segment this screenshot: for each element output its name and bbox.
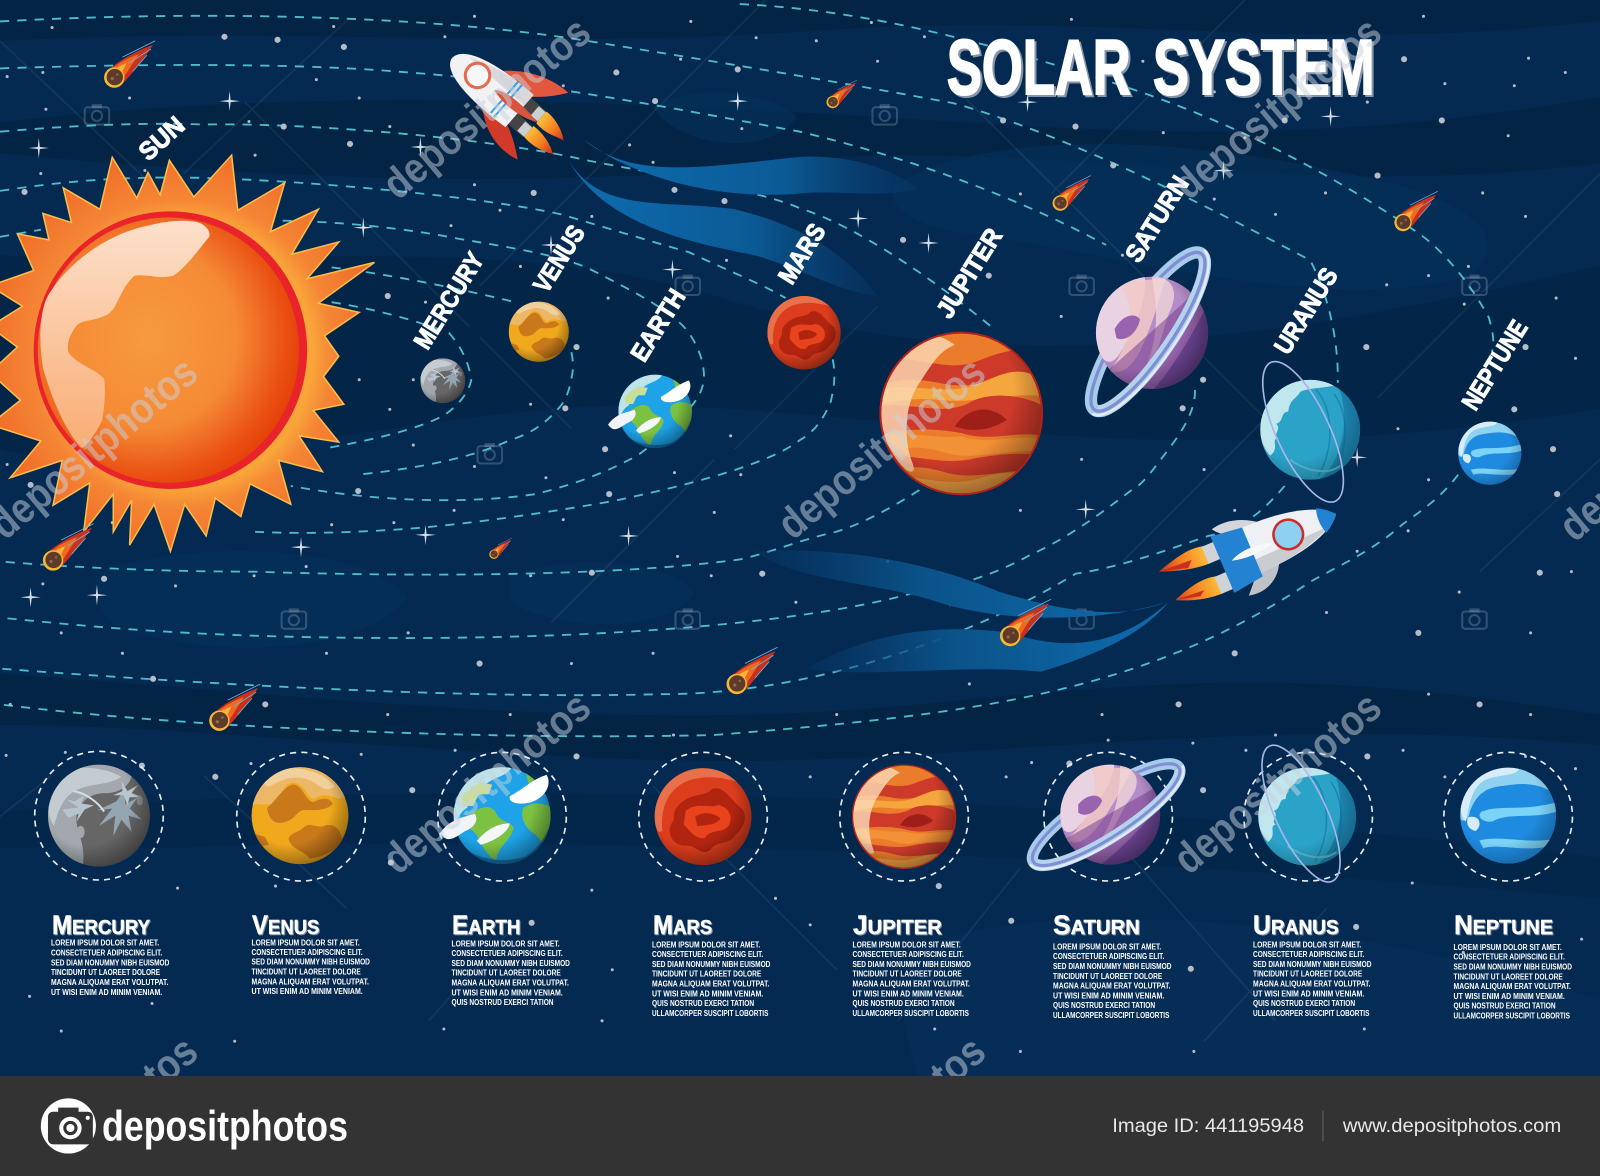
comets bbox=[43, 41, 1438, 731]
sun rays bbox=[0, 155, 374, 551]
Uranus thin ring bbox=[1247, 351, 1359, 512]
info: Mercury: UT WISI ENIM AD MINIM VENIAM. bbox=[51, 988, 162, 997]
watermarks: depositphotos bbox=[1164, 683, 1391, 884]
planet: Uranus orbit bbox=[1260, 380, 1360, 480]
title: SYSTEM bbox=[1153, 25, 1374, 111]
planet: Mercury orbit bbox=[420, 358, 465, 403]
info: Uranus: UT WISI ENIM AD MINIM VENIAM. bbox=[1253, 989, 1364, 998]
watermarks: depositphotos bbox=[374, 683, 600, 884]
blue rocket trail bottom bbox=[755, 550, 1168, 672]
label: Neptune: NEPTUNE bbox=[1457, 315, 1534, 415]
planet: Uranus row bbox=[1258, 768, 1356, 866]
info: Earth: SED DIAM NONUMMY NIBH EUISMOD bbox=[452, 959, 570, 968]
info: Venus: CONSECTETUER ADIPISCING ELIT. bbox=[252, 948, 363, 957]
info: Uranus: URANUS bbox=[1253, 910, 1339, 940]
sun bbox=[0, 155, 374, 551]
info: Mercury: SED DIAM NONUMMY NIBH EUISMOD bbox=[51, 958, 169, 967]
info: Venus: TINCIDUNT UT LAOREET DOLORE bbox=[252, 967, 361, 976]
planet: Earth orbit bbox=[608, 375, 693, 448]
planet: Venus orbit bbox=[509, 302, 569, 362]
info: Mercury bbox=[51, 910, 169, 997]
planet: Mars row bbox=[655, 768, 752, 865]
info: Neptune: QUIS NOSTRUD EXERCI TATION bbox=[1454, 1002, 1556, 1011]
info: Saturn: TINCIDUNT UT LAOREET DOLORE bbox=[1053, 972, 1163, 981]
label: Sun: SUN bbox=[134, 112, 190, 166]
info: Neptune: LOREM IPSUM DOLOR SIT AMET. bbox=[1454, 943, 1562, 952]
title: SOLAR bbox=[947, 25, 1131, 111]
info: Uranus: ULLAMCORPER SUSCIPIT LOBORTIS bbox=[1253, 1009, 1370, 1018]
footer url: www.depositphotos.com bbox=[1342, 1115, 1561, 1137]
footer logo icon bbox=[41, 1098, 96, 1154]
info: Saturn: ULLAMCORPER SUSCIPIT LOBORTIS bbox=[1053, 1011, 1170, 1020]
info: Uranus: TINCIDUNT UT LAOREET DOLORE bbox=[1253, 970, 1363, 979]
info: Earth: LOREM IPSUM DOLOR SIT AMET. bbox=[452, 939, 560, 948]
info: Uranus: MAGNA ALIQUAM ERAT VOLUTPAT. bbox=[1253, 980, 1370, 989]
sun highlight bbox=[40, 221, 210, 448]
planet: Jupiter row bbox=[847, 765, 961, 874]
planet: Saturn row bbox=[1021, 749, 1197, 886]
label: Jupiter: JUPITER bbox=[931, 224, 1008, 323]
label: Venus: VENUS bbox=[528, 221, 591, 298]
info: Mars: MARS bbox=[653, 910, 712, 940]
info: Mars: CONSECTETUER ADIPISCING ELIT. bbox=[652, 950, 763, 959]
info: Mars: UT WISI ENIM AD MINIM VENIAM. bbox=[652, 989, 763, 998]
info: Mercury: TINCIDUNT UT LAOREET DOLORE bbox=[51, 968, 161, 977]
info: Neptune: ULLAMCORPER SUSCIPIT LOBORTIS bbox=[1454, 1011, 1570, 1020]
info: Mars: QUIS NOSTRUD EXERCI TATION bbox=[652, 999, 754, 1008]
info: Venus: MAGNA ALIQUAM ERAT VOLUTPAT. bbox=[252, 977, 369, 986]
info: Mars: SED DIAM NONUMMY NIBH EUISMOD bbox=[652, 960, 770, 969]
info: Venus bbox=[252, 910, 370, 996]
info: Uranus: CONSECTETUER ADIPISCING ELIT. bbox=[1253, 950, 1364, 959]
info: Uranus: QUIS NOSTRUD EXERCI TATION bbox=[1253, 999, 1355, 1008]
planet labels angled bbox=[134, 112, 1534, 415]
label: Saturn: SATURN bbox=[1120, 171, 1195, 267]
info: Jupiter: ULLAMCORPER SUSCIPIT LOBORTIS bbox=[853, 1009, 969, 1018]
sparkle stars bbox=[20, 91, 1367, 607]
info: Uranus bbox=[1253, 910, 1372, 1018]
watermarks: depositphotos bbox=[768, 348, 995, 549]
info: Neptune: NEPTUNE bbox=[1454, 910, 1553, 940]
footer bar bbox=[0, 1076, 1600, 1176]
info: Saturn: SATURN bbox=[1053, 910, 1140, 940]
Uranus row ring bbox=[1246, 735, 1356, 892]
info: Venus: UT WISI ENIM AD MINIM VENIAM. bbox=[252, 987, 363, 996]
orbit planets bbox=[420, 240, 1521, 512]
info: Mars bbox=[652, 910, 770, 1018]
info: Mercury: LOREM IPSUM DOLOR SIT AMET. bbox=[51, 938, 159, 947]
info: Saturn: SED DIAM NONUMMY NIBH EUISMOD bbox=[1053, 962, 1172, 971]
info: Mars: LOREM IPSUM DOLOR SIT AMET. bbox=[652, 940, 760, 949]
info: Saturn: LOREM IPSUM DOLOR SIT AMET. bbox=[1053, 942, 1161, 951]
title: SOLAR bbox=[949, 27, 1133, 113]
info: Saturn: UT WISI ENIM AD MINIM VENIAM. bbox=[1053, 991, 1164, 1000]
planet: Neptune row bbox=[1459, 768, 1556, 864]
footer brand name: depositphotos bbox=[102, 1102, 348, 1150]
info: Earth: MAGNA ALIQUAM ERAT VOLUTPAT. bbox=[452, 979, 569, 988]
info: Earth: UT WISI ENIM AD MINIM VENIAM. bbox=[452, 988, 563, 997]
info: Saturn bbox=[1053, 910, 1172, 1020]
info: Uranus: LOREM IPSUM DOLOR SIT AMET. bbox=[1253, 940, 1361, 949]
planet: Earth row bbox=[440, 767, 552, 864]
info: Jupiter: JUPITER bbox=[853, 910, 942, 940]
info: Neptune: MAGNA ALIQUAM ERAT VOLUTPAT. bbox=[1454, 982, 1571, 991]
info: Mercury: CONSECTETUER ADIPISCING ELIT. bbox=[51, 948, 162, 958]
sun sphere bbox=[34, 211, 307, 489]
info: Earth: TINCIDUNT UT LAOREET DOLORE bbox=[452, 969, 561, 978]
label: Mercury: MERCURY bbox=[409, 248, 490, 354]
info: Neptune: UT WISI ENIM AD MINIM VENIAM. bbox=[1454, 992, 1565, 1001]
info: Saturn: QUIS NOSTRUD EXERCI TATION bbox=[1053, 1001, 1155, 1010]
info: Earth: QUIS NOSTRUD EXERCI TATION bbox=[452, 998, 554, 1007]
label: Uranus: URANUS bbox=[1269, 263, 1344, 359]
footer image id: Image ID: 441195948 bbox=[1112, 1115, 1304, 1137]
title bbox=[947, 25, 1377, 113]
rocket top bbox=[429, 20, 591, 178]
info: Venus: LOREM IPSUM DOLOR SIT AMET. bbox=[252, 938, 360, 947]
info: Venus: VENUS bbox=[252, 910, 319, 940]
planet: Neptune orbit bbox=[1457, 422, 1521, 485]
planet: Venus row bbox=[252, 767, 348, 864]
planet row with dashed rings bbox=[35, 735, 1572, 892]
info: Jupiter: LOREM IPSUM DOLOR SIT AMET. bbox=[853, 940, 961, 949]
info: Venus: SED DIAM NONUMMY NIBH EUISMOD bbox=[252, 958, 370, 967]
info: Jupiter bbox=[853, 910, 971, 1018]
info: Saturn: CONSECTETUER ADIPISCING ELIT. bbox=[1053, 952, 1164, 961]
info: Neptune: TINCIDUNT UT LAOREET DOLORE bbox=[1454, 972, 1563, 981]
planet: Jupiter orbit bbox=[871, 332, 1051, 503]
info: Jupiter: QUIS NOSTRUD EXERCI TATION bbox=[853, 999, 955, 1008]
title: SYSTEM bbox=[1155, 27, 1377, 113]
info: Mars: ULLAMCORPER SUSCIPIT LOBORTIS bbox=[652, 1009, 769, 1018]
info: Mercury: MERCURY bbox=[52, 910, 150, 940]
label: Earth: EARTH bbox=[626, 284, 691, 367]
info: Mars: TINCIDUNT UT LAOREET DOLORE bbox=[652, 970, 762, 979]
info: Neptune bbox=[1454, 910, 1572, 1020]
planet: Mars orbit bbox=[767, 296, 841, 370]
info: Uranus: SED DIAM NONUMMY NIBH EUISMOD bbox=[1253, 960, 1372, 969]
info: Jupiter: CONSECTETUER ADIPISCING ELIT. bbox=[853, 950, 964, 959]
planet: Saturn orbit bbox=[1074, 240, 1228, 430]
info: Neptune: SED DIAM NONUMMY NIBH EUISMOD bbox=[1454, 962, 1572, 971]
planet: Mercury row bbox=[48, 765, 150, 867]
info: Jupiter: TINCIDUNT UT LAOREET DOLORE bbox=[853, 970, 962, 979]
info: Mercury: MAGNA ALIQUAM ERAT VOLUTPAT. bbox=[51, 978, 168, 987]
info: Neptune: CONSECTETUER ADIPISCING ELIT. bbox=[1454, 953, 1565, 962]
info: Jupiter: UT WISI ENIM AD MINIM VENIAM. bbox=[853, 989, 964, 998]
rocket bottom bbox=[1151, 481, 1353, 625]
info: Jupiter: MAGNA ALIQUAM ERAT VOLUTPAT. bbox=[853, 980, 970, 989]
info: Jupiter: SED DIAM NONUMMY NIBH EUISMOD bbox=[853, 960, 971, 969]
info: Earth: CONSECTETUER ADIPISCING ELIT. bbox=[452, 949, 563, 958]
blue rocket trail top bbox=[568, 140, 918, 296]
info: Mars: MAGNA ALIQUAM ERAT VOLUTPAT. bbox=[652, 980, 769, 989]
info: Saturn: MAGNA ALIQUAM ERAT VOLUTPAT. bbox=[1053, 982, 1170, 991]
orbit lines bbox=[0, 4, 1493, 736]
info: Earth: EARTH bbox=[452, 910, 520, 940]
info: Earth bbox=[452, 910, 570, 1007]
label: Mars: MARS bbox=[773, 219, 832, 289]
